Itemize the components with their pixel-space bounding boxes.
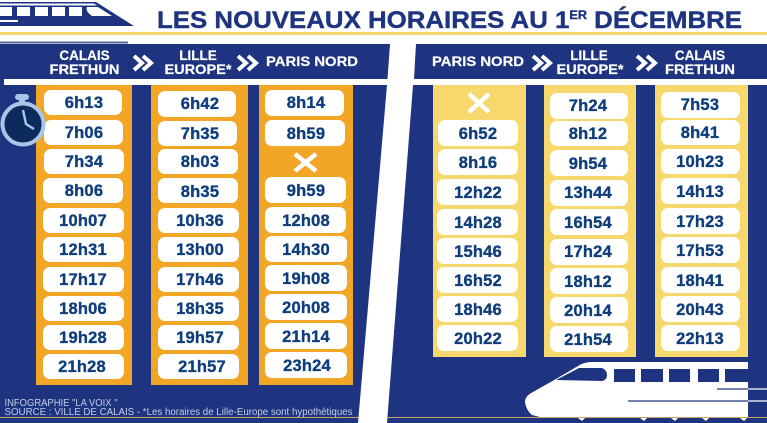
header: right stations: PARIS NORD: [432, 54, 524, 69]
column: Calais Frethun departures: 17h17: [59, 271, 107, 289]
column: Calais Frethun arrivals: 8h41: [681, 124, 719, 142]
train rails strip: [0, 42, 128, 44]
column: Lille Europe arrivals: 8h12: [569, 125, 607, 143]
header: right stations: [414, 44, 767, 79]
column: Calais Frethun departures: 18h06: [59, 300, 107, 318]
title: ER: [569, 8, 587, 22]
column: Paris Nord departures: 14h28: [454, 214, 502, 232]
column: Lille Europe departures: 6h42: [181, 95, 219, 113]
credits and source: INFOGRAPHIE "LA VOIX ": [4, 398, 118, 409]
background: left timetable: [0, 79, 387, 423]
column: Calais Frethun departures: 7h34: [65, 153, 104, 171]
column: Paris Nord arrivals: 8h59: [287, 125, 325, 143]
header: right stations: FRETHUN: [665, 62, 735, 77]
column: Paris Nord arrivals: 12h08: [282, 212, 330, 230]
credits and source: SOURCE : VILLE DE CALAIS - *Les horaires de Lille-Europe sont hypothétiques: [4, 407, 352, 418]
column: Paris Nord arrivals: 8h14: [287, 94, 326, 112]
column: Calais Frethun arrivals: 14h13: [676, 183, 724, 201]
icon: cross, no train: [295, 154, 316, 171]
column: Paris Nord departures: 8h16: [459, 154, 497, 172]
column: Paris Nord arrivals: 19h08: [282, 270, 330, 288]
header: right stations: LILLE: [570, 48, 608, 63]
column: Calais Frethun departures: 7h06: [65, 124, 103, 142]
column: Calais Frethun departures: [36, 85, 132, 385]
column: Calais Frethun arrivals: 17h53: [676, 242, 724, 260]
column: Calais Frethun departures: 8h06: [65, 182, 103, 200]
header: right stations: CALAIS: [675, 48, 725, 63]
column: Paris Nord departures: 16h52: [454, 272, 502, 290]
column: Lille Europe arrivals: 17h24: [564, 243, 613, 261]
header: left stations: PARIS NORD: [266, 54, 358, 69]
icon: cross, no train: [469, 94, 489, 112]
column: Lille Europe arrivals: 20h14: [564, 302, 613, 320]
column: Lille Europe arrivals: 18h12: [564, 273, 612, 291]
title: LES NOUVEAUX HORAIRES AU 1: [157, 7, 548, 34]
column: Calais Frethun departures: 21h28: [58, 358, 106, 376]
column: Lille Europe departures: [151, 85, 248, 385]
column: Paris Nord departures: 12h22: [454, 184, 502, 202]
column: Lille Europe departures: 8h03: [181, 153, 219, 171]
column: Paris Nord departures: 18h46: [454, 301, 502, 319]
icon: white train bottom right: [525, 362, 767, 421]
column: Calais Frethun departures: 12h31: [59, 241, 107, 259]
column: Calais Frethun arrivals: 22h13: [676, 330, 724, 348]
column: Calais Frethun arrivals: 18h41: [676, 272, 724, 290]
column: Calais Frethun arrivals: 7h53: [681, 96, 719, 114]
column: Calais Frethun departures: 6h13: [65, 94, 103, 112]
icon: train top left: [0, 2, 134, 26]
column: Lille Europe departures: 21h57: [178, 358, 226, 376]
column: Paris Nord arrivals: [259, 85, 353, 385]
column: Lille Europe departures: 18h35: [176, 300, 224, 318]
column: Calais Frethun departures: 10h07: [59, 212, 107, 230]
column: Lille Europe arrivals: 9h54: [569, 155, 608, 173]
column: Paris Nord departures: 15h46: [454, 243, 502, 261]
panel: left direction: [0, 44, 390, 423]
column: Paris Nord arrivals: 23h24: [283, 357, 332, 375]
column: Paris Nord arrivals: 20h08: [282, 299, 330, 317]
column: Lille Europe arrivals: 13h44: [564, 184, 613, 202]
column: Calais Frethun arrivals: 17h23: [676, 213, 724, 231]
header: left stations: [0, 44, 390, 79]
icon: stopwatch: [2, 94, 44, 144]
header: left stations: LILLE: [179, 48, 217, 63]
header: left stations: FRETHUN: [50, 62, 120, 77]
column: Calais Frethun arrivals: [655, 85, 748, 357]
header: left stations: EUROPE*: [164, 62, 232, 77]
header: left stations: CALAIS: [59, 48, 110, 63]
column: Lille Europe arrivals: 21h54: [564, 331, 613, 349]
column: Paris Nord arrivals: 9h59: [287, 182, 325, 200]
column: Lille Europe departures: 17h46: [176, 271, 224, 289]
column: Calais Frethun arrivals: 20h43: [676, 301, 724, 319]
column: Lille Europe arrivals: [544, 85, 636, 357]
column: Lille Europe departures: 7h35: [181, 125, 219, 143]
ground line: [0, 416, 767, 418]
column: Lille Europe arrivals: 7h24: [569, 97, 608, 115]
column: Lille Europe departures: 13h00: [176, 241, 224, 259]
header: right stations: EUROPE*: [556, 62, 624, 77]
column: Lille Europe departures: 8h35: [181, 183, 219, 201]
column: Lille Europe departures: 19h57: [176, 329, 224, 347]
title underline: [0, 32, 767, 35]
column: Calais Frethun departures: 19h28: [59, 329, 107, 347]
column: Paris Nord departures: 6h52: [459, 125, 497, 143]
column: Lille Europe departures: 10h36: [176, 212, 224, 230]
title: DÉCEMBRE: [587, 6, 742, 34]
column: Paris Nord departures: [433, 85, 526, 357]
column: Paris Nord arrivals: 21h14: [282, 328, 331, 346]
panel: right direction: [387, 44, 767, 423]
credits and source: [4, 398, 352, 418]
column: Paris Nord arrivals: 14h30: [282, 241, 330, 259]
column: Calais Frethun arrivals: 10h23: [676, 153, 724, 171]
column: Lille Europe arrivals: 16h54: [564, 214, 613, 232]
column: Paris Nord departures: 20h22: [454, 330, 502, 348]
background: right timetable: [387, 85, 767, 423]
